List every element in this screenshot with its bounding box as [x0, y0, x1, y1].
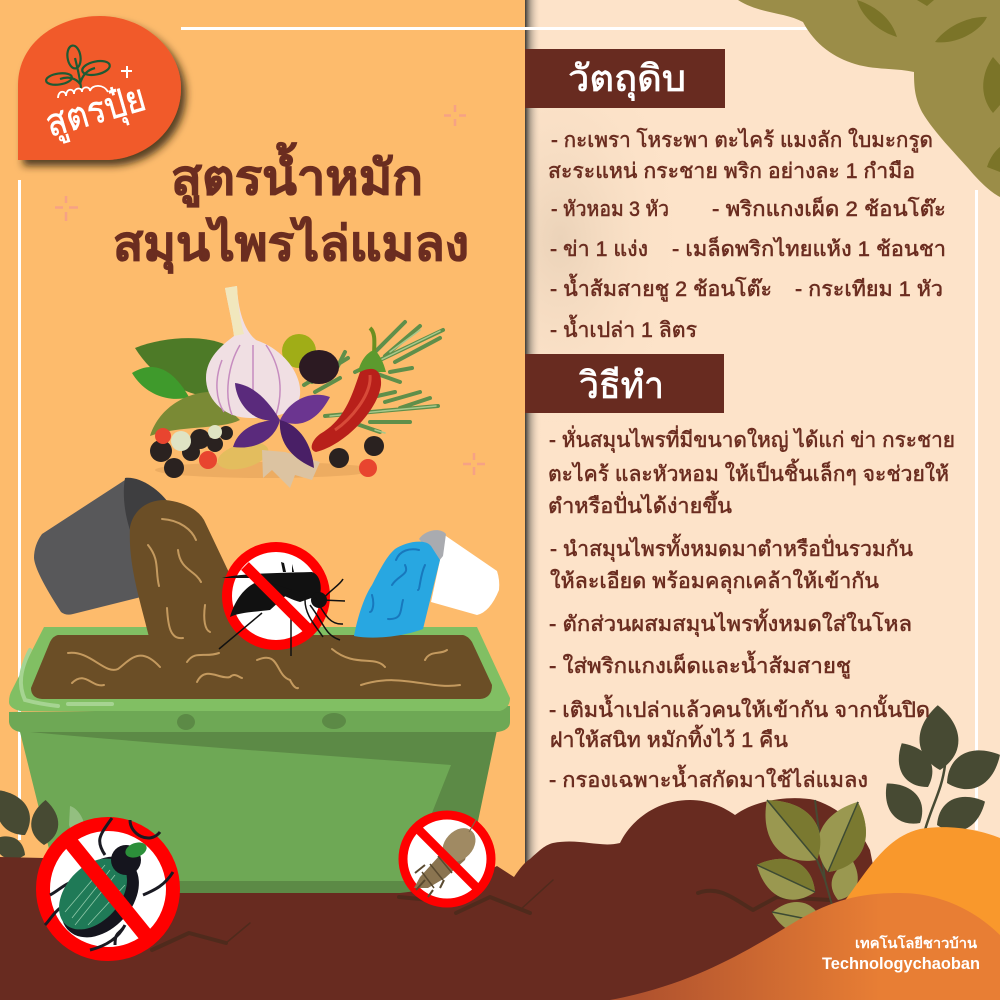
- text block: ingredients: - กะเพรา โหระพา ตะไคร้ แมงลัก ใบมะกรูด: [551, 128, 933, 153]
- ginger: [215, 438, 271, 474]
- icon: sprout: [45, 45, 111, 88]
- foliage: olive plant: [749, 785, 879, 937]
- sparkle: upper right of left panel: [444, 105, 466, 126]
- bucket body: [20, 730, 497, 893]
- text block: method steps: [548, 425, 955, 792]
- foliage: small left plant: [0, 783, 59, 865]
- text block: ingredients: - ข่า 1 แง่ง: [550, 238, 648, 261]
- title: สมุนไพรไล่แมลง: [113, 215, 469, 274]
- text block: ingredients: - พริกแกงเผ็ด 2 ช้อนโต๊ะ: [712, 195, 946, 221]
- peppercorns: [150, 426, 384, 478]
- logo badge: สูตรปุ๋ย: [41, 77, 151, 147]
- text block: ingredients: - หัวหอม 3 หัว: [551, 198, 669, 221]
- hill: bright orange: [820, 827, 1000, 1000]
- icon: gray pot pouring: [34, 478, 170, 615]
- chili: [312, 328, 386, 452]
- text block: method steps: ให้ละเอียด พร้อมคลุกเคล้าให้เข้ากัน: [550, 569, 879, 594]
- rosemary branches: [304, 322, 443, 433]
- text block: method steps: ตะไคร้ และหัวหอม ให้เป็นชิ้นเล็กๆ จะช่วยให้: [548, 459, 949, 486]
- illustration: herbs and spices: [132, 286, 443, 488]
- text block: method steps: - ใส่พริกแกงเผ็ดและน้ำส้มสายชู: [549, 651, 851, 679]
- text block: method steps: - หั่นสมุนไพรที่มีขนาดใหญ่ ได้แก่ ข่า กระชาย: [549, 425, 955, 453]
- sparkle: right of herbs: [463, 453, 485, 475]
- lime and olive: [282, 334, 316, 368]
- basil: [233, 383, 330, 468]
- bay leaves: [135, 338, 226, 398]
- text block: method steps: - กรองเฉพาะน้ำสกัดมาใช้ไล่แมลง: [549, 765, 868, 792]
- heading: ingredients: [525, 49, 725, 108]
- text block: ingredients: [548, 128, 946, 342]
- heading: method: วิธีทำ: [579, 365, 664, 406]
- foliage: top right corner: [738, 0, 1000, 197]
- bucket: [9, 627, 510, 893]
- ban sign: larva: [403, 815, 491, 903]
- text block: method steps: - นำสมุนไพรทั้งหมดมาตำหรือปั่นรวมกัน: [550, 534, 913, 562]
- text block: ingredients: - เมล็ดพริกไทยแห้ง 1 ช้อนชา: [672, 235, 946, 261]
- heading: method: [525, 354, 724, 413]
- panel: right cream background: [430, 0, 1000, 1000]
- soil cracks: [152, 880, 830, 950]
- mosquito silhouette: [219, 562, 345, 656]
- text block: method steps: - เติมน้ำเปล่าแล้วคนให้เข้ากัน จากนั้นปิด: [549, 695, 930, 722]
- soil surface: [31, 635, 492, 699]
- icon: white cup pouring: [419, 530, 499, 615]
- ban sign: mosquito: [219, 547, 345, 656]
- worm squiggles: [68, 519, 460, 688]
- foliage: dark plant right: [875, 705, 1000, 839]
- title: [113, 142, 469, 274]
- garlic: [206, 286, 300, 418]
- text block: method steps: ฝาให้สนิท หมักทิ้งไว้ 1 คืน: [550, 725, 788, 752]
- blue compost column: [354, 542, 440, 638]
- footer credit: [822, 934, 980, 973]
- sparkle: left of title: [55, 196, 78, 221]
- footer credit: เทคโนโลยีชาวบ้าน: [855, 934, 977, 951]
- text block: ingredients: - น้ำเปล่า 1 ลิตร: [550, 315, 697, 342]
- text block: ingredients: - น้ำส้มสายชู 2 ช้อนโต๊ะ: [550, 274, 772, 302]
- footer credit: Technologychaoban: [822, 954, 980, 973]
- panel: left orange background: [0, 0, 525, 1000]
- text block: method steps: - ตักส่วนผสมสมุนไพรทั้งหมดใส่ในโหล: [549, 609, 912, 637]
- larva: [414, 820, 482, 897]
- text block: ingredients: - กระเทียม 1 หัว: [795, 278, 943, 301]
- ground: dark brown soil: [0, 798, 900, 1000]
- text block: method steps: ตำหรือปั่นได้ง่ายขึ้น: [548, 491, 732, 518]
- beetle: [45, 818, 173, 953]
- heading: ingredients: วัตถุดิบ: [568, 58, 686, 101]
- ban sign: beetle: [43, 818, 173, 954]
- compost column: [130, 500, 247, 640]
- logo badge: [18, 16, 181, 160]
- frame lines: [18, 27, 978, 840]
- bucket rim: [9, 706, 510, 732]
- wave: darker orange overlay: [610, 893, 1000, 1000]
- text block: ingredients: สะระแหน่ กระชาย พริก อย่างละ 1 กำมือ: [548, 160, 915, 183]
- title: สูตรน้ำหมัก: [171, 142, 423, 208]
